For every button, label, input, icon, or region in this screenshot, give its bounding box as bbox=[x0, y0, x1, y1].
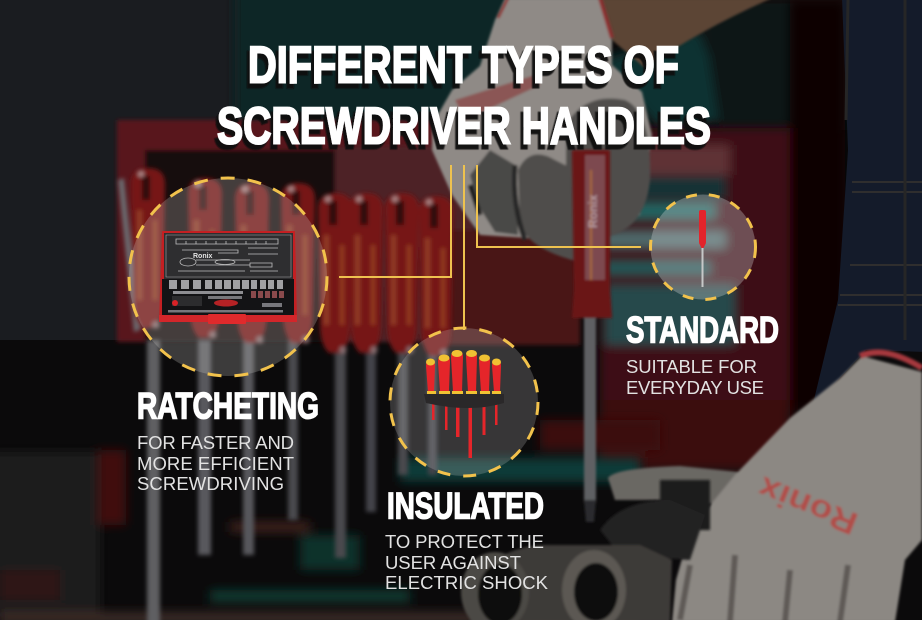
ratcheting description: FOR FASTER AND bbox=[137, 432, 294, 453]
insulated heading: INSULATED bbox=[387, 486, 544, 526]
ratcheting circle bbox=[129, 178, 327, 376]
title: SCREWDRIVER HANDLES bbox=[217, 98, 711, 156]
pipe fitting bbox=[461, 480, 710, 620]
standard circle bbox=[650, 194, 756, 300]
title: DIFFERENT TYPES OF bbox=[248, 36, 679, 94]
standard description: EVERYDAY USE bbox=[626, 377, 764, 398]
insulated description bbox=[385, 531, 549, 593]
right white glove bbox=[608, 352, 922, 620]
standard description: SUITABLE FOR bbox=[626, 356, 757, 377]
icon: socket set case bbox=[159, 231, 297, 324]
screwdriver in hand bbox=[572, 150, 612, 522]
upper gloved hand bbox=[432, 0, 652, 262]
ratcheting description bbox=[137, 432, 294, 494]
ratcheting description: MORE EFFICIENT bbox=[137, 453, 294, 474]
insulated description: TO PROTECT THE bbox=[385, 531, 544, 552]
title bbox=[217, 36, 711, 156]
insulated circle bbox=[390, 328, 538, 476]
screwdriver in hand: Ronix bbox=[586, 194, 600, 228]
panel: standard bbox=[650, 194, 756, 300]
blurred screwdrivers on board bbox=[118, 168, 453, 620]
panel: insulated bbox=[390, 328, 538, 476]
panel: ratcheting bbox=[129, 178, 327, 376]
standard heading: STANDARD bbox=[626, 310, 779, 350]
connector lines bbox=[339, 165, 641, 330]
insulated description: USER AGAINST bbox=[385, 552, 521, 573]
right sleeve bbox=[812, 0, 922, 408]
insulated description: ELECTRIC SHOCK bbox=[385, 572, 549, 593]
icon: insulated screwdrivers bbox=[424, 350, 504, 458]
ratcheting heading: RATCHETING bbox=[137, 386, 319, 426]
dark lower floor elements bbox=[0, 420, 660, 620]
glove logo: Ronix bbox=[752, 470, 863, 542]
case logo: Ronix bbox=[193, 253, 213, 260]
teal wall and arm bbox=[235, 0, 845, 130]
icon: standard screwdriver bbox=[699, 210, 706, 287]
red tool board bbox=[117, 120, 580, 345]
ratcheting description: SCREWDRIVING bbox=[137, 473, 284, 494]
standard description bbox=[626, 356, 764, 398]
